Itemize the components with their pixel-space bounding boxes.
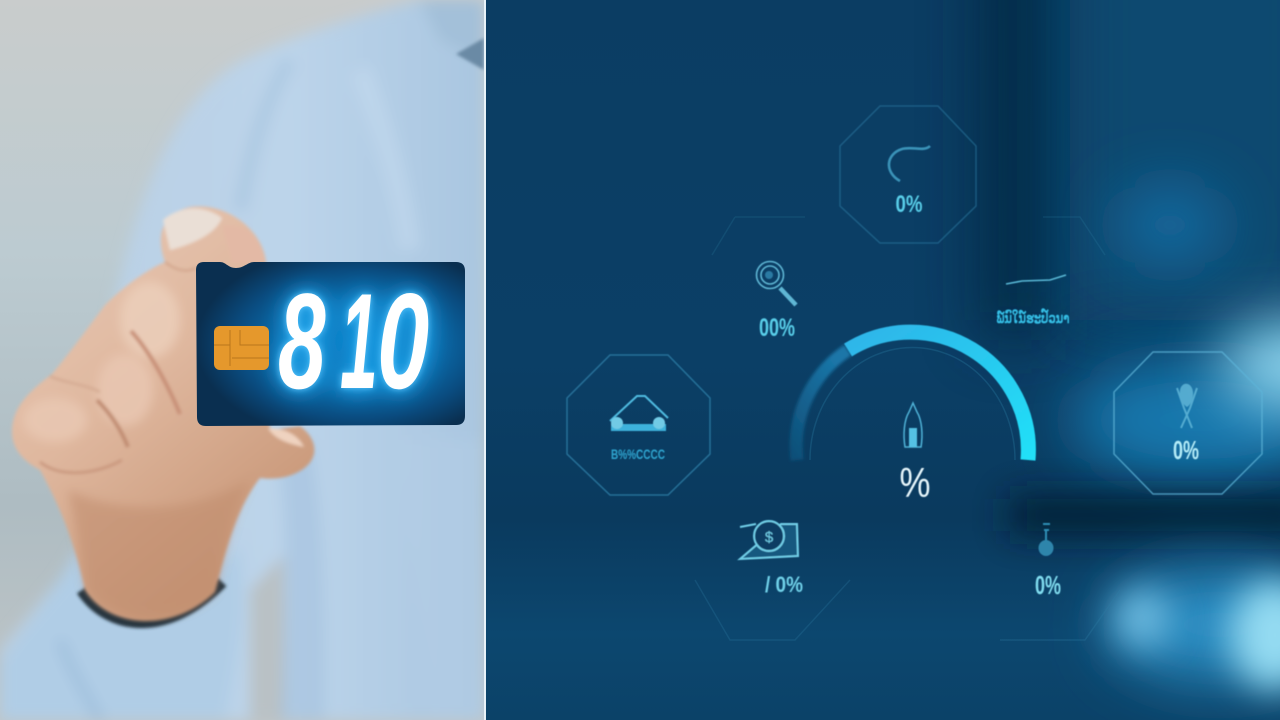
panel: dark blue dashboard [486,0,1280,720]
label: 0% [1035,570,1061,600]
card number: 0 [377,265,429,417]
card number: 1 [340,265,378,417]
label: B%%CCCC [611,446,665,462]
gauge arc [796,332,1028,460]
icon: roof basket [610,396,668,431]
center metric [900,403,930,506]
creases [131,331,180,414]
divider [484,0,486,720]
center percent: % [900,459,930,506]
icon: camera coin: $ [765,529,774,546]
SIM card [196,262,465,426]
metric: top [889,146,930,218]
label: ພ໌ນົໃນ໌ຮະປ໌ວນາ [996,307,1070,327]
card number: 8 [278,266,326,418]
label: 00% [759,314,795,342]
card number [278,265,429,418]
hexagon: upper left [712,217,805,255]
metric: lower left [740,521,803,597]
metric: left [610,396,668,462]
label: 0% [896,191,922,218]
shirt [0,0,484,720]
hand silhouette [12,206,314,621]
icon: trophy cross [1177,384,1197,428]
finger highlights [120,282,180,358]
octagon: top [840,106,976,243]
metric: upper right [996,275,1070,327]
thumb highlight [268,428,304,447]
lower palm shading [68,480,250,618]
label: 0% [1173,435,1199,465]
hexagon: lower left [695,580,850,640]
hexagon: upper right [1043,217,1105,255]
card number: 1 [340,265,378,417]
hexagon: lower right [1000,622,1098,640]
hand [12,206,314,621]
icon: magnifier key [756,262,796,305]
metric: right [1173,384,1199,465]
metric: lower right [1035,524,1061,600]
card number: 8 [278,266,326,418]
card number: 1 [340,265,378,417]
hexagon frames [567,106,1262,640]
SIM chip [214,326,269,370]
octagon: left [567,355,710,495]
icon: bottle [904,403,922,447]
panel: photo of hand holding SIM card [0,0,484,720]
octagon: right [1114,352,1262,494]
card number: 0 [377,265,429,417]
icon: trend line [1006,275,1066,284]
icon: bulb [1038,524,1054,556]
fingertip highlight [163,208,222,250]
background light blobs [980,0,1280,690]
icon: hook [889,146,930,181]
label: / 0% [765,572,803,597]
metric: upper left [756,262,796,342]
card number: 0 [377,265,429,417]
card number: 8 [278,266,326,418]
